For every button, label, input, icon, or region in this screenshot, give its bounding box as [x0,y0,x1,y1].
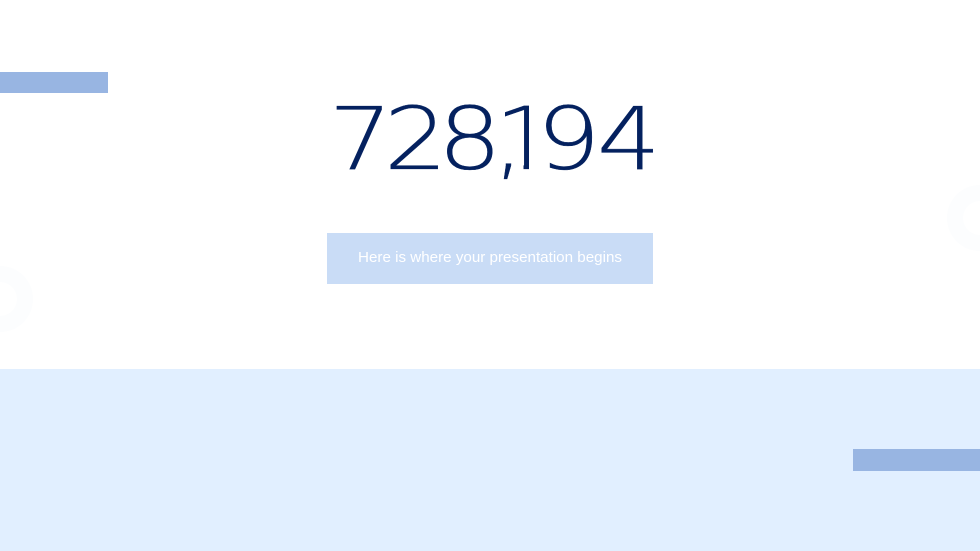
decorative ring: left [0,274,25,324]
accent bar: top left [0,72,108,93]
accent bar: bottom right [853,449,980,471]
caption box [327,233,653,284]
decorative ring: right [955,193,980,243]
caption text: Here is where your presentation begins [358,249,622,266]
big number: 728, [329,90,524,190]
big number [336,104,653,180]
big number: 1 [493,90,557,190]
big number: 94 [537,90,661,190]
lower background band [0,369,980,551]
